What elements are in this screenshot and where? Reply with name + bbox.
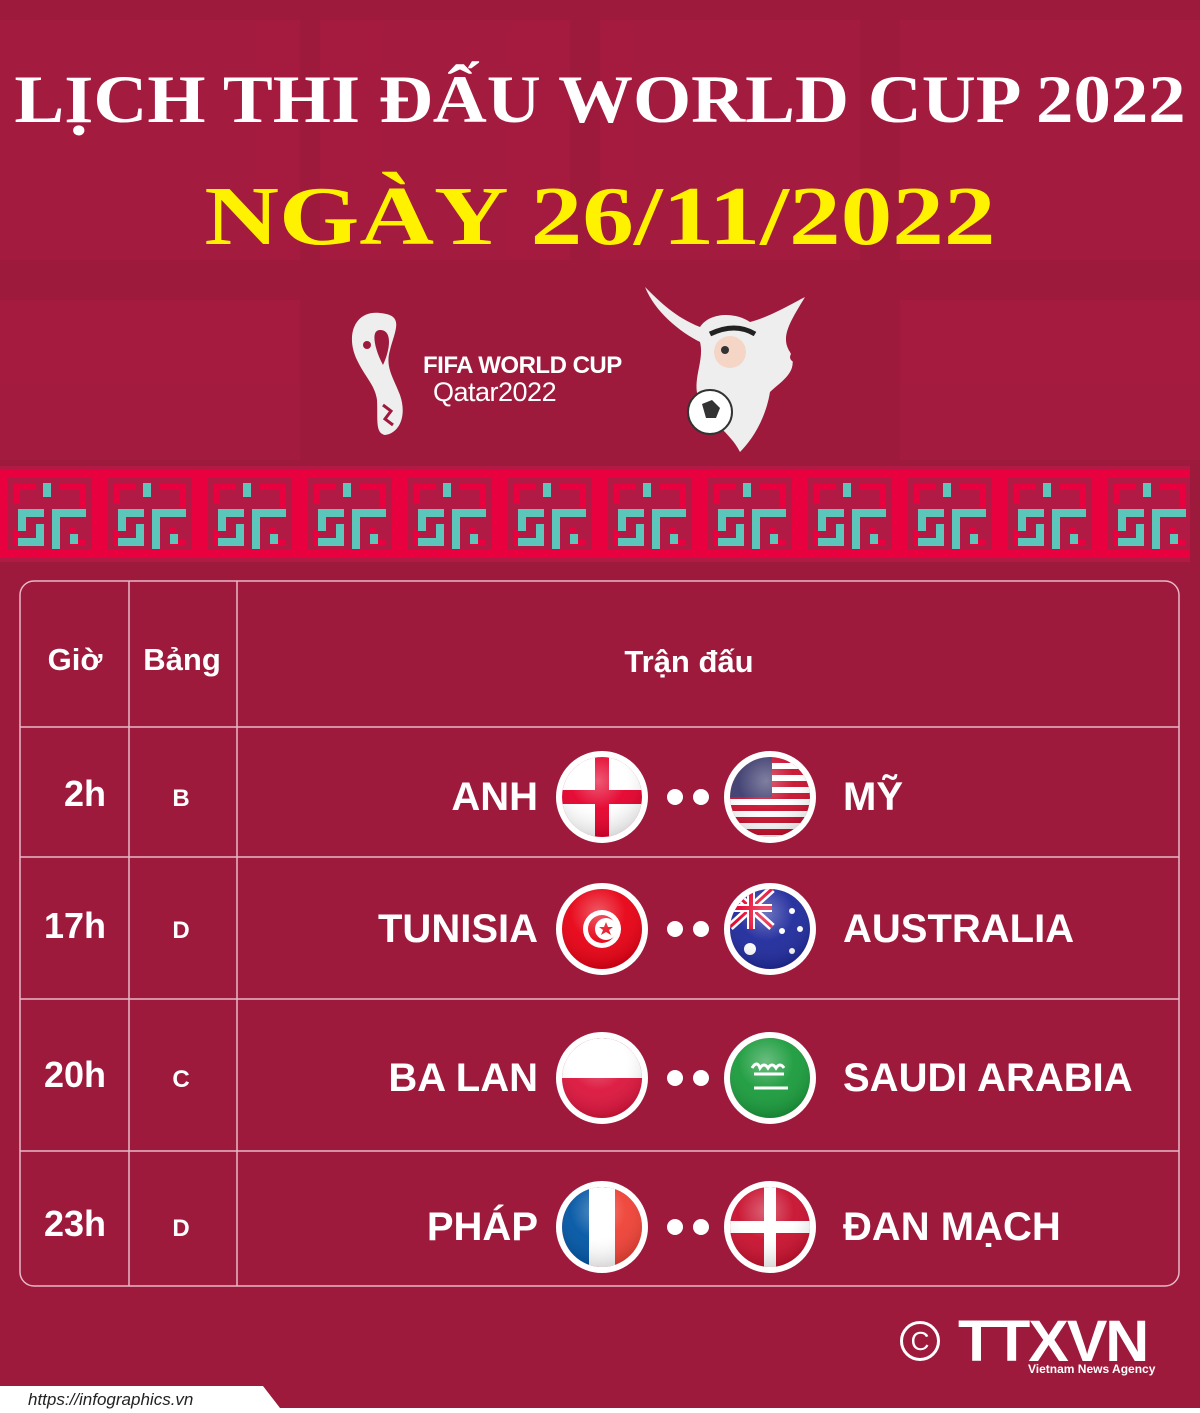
times, groups and team names: B	[172, 785, 190, 812]
times, groups and team names: ANH	[451, 775, 538, 819]
times, groups and team names: BA LAN	[388, 1056, 538, 1100]
times, groups and team names: MỸ	[843, 773, 903, 819]
logo text: Qatar2022	[433, 377, 556, 407]
times, groups and team names: SAUDI ARABIA	[843, 1056, 1133, 1100]
flag: Poland	[559, 1035, 645, 1121]
flag: Tunisia	[559, 886, 645, 972]
schedule table	[19, 580, 1180, 1287]
decorative pattern band	[0, 466, 1190, 562]
times, groups and team names: PHÁP	[427, 1204, 538, 1249]
text: https://infographics.vn	[28, 1390, 193, 1409]
table header	[48, 642, 754, 679]
times, groups and team names: ĐAN MẠCH	[843, 1205, 1061, 1249]
flag: Australia	[727, 886, 813, 972]
times, groups and team names: 23h	[44, 1203, 106, 1244]
logo text: FIFA WORLD CUP	[423, 352, 622, 379]
times, groups and team names: 2h	[64, 773, 106, 814]
flag: England	[559, 754, 645, 840]
logo: TTXVN copyright: C	[911, 1326, 929, 1356]
footer url bar	[0, 1386, 1200, 1413]
logo: FIFA World Cup Qatar 2022	[352, 312, 622, 435]
times, groups and team names: 17h	[44, 905, 106, 946]
table header: Trận đấu	[624, 644, 754, 679]
times, groups and team names: C	[172, 1066, 190, 1093]
title: LỊCH THI ĐẤU WORLD CUP 2022	[14, 61, 1186, 137]
table frame	[20, 581, 1179, 1286]
mascot	[645, 287, 805, 452]
table header: Bảng	[143, 642, 221, 677]
times, groups and team names: TUNISIA	[378, 907, 538, 951]
background tint squares	[0, 0, 1200, 470]
times, groups and team names: D	[172, 1215, 190, 1242]
logo: TTXVN copyright: Vietnam News Agency	[1028, 1362, 1155, 1376]
icon: trophy emblem	[352, 312, 403, 435]
subtitle date: NGÀY 26/11/2022	[204, 170, 996, 263]
table header: Giờ	[48, 642, 103, 677]
flag: Saudi Arabia	[727, 1035, 813, 1121]
flag: Denmark	[727, 1184, 813, 1270]
times, groups and team names: 20h	[44, 1054, 106, 1095]
times, groups and team names: D	[172, 917, 190, 944]
flag: USA	[727, 754, 813, 840]
vs dots	[667, 789, 709, 1235]
logo text	[423, 352, 622, 407]
times, groups and team names: AUSTRALIA	[843, 907, 1074, 951]
times, groups and team names	[44, 773, 1133, 1249]
flag: France	[559, 1184, 645, 1270]
logo: TTXVN copyright: TTXVN	[958, 1309, 1147, 1374]
